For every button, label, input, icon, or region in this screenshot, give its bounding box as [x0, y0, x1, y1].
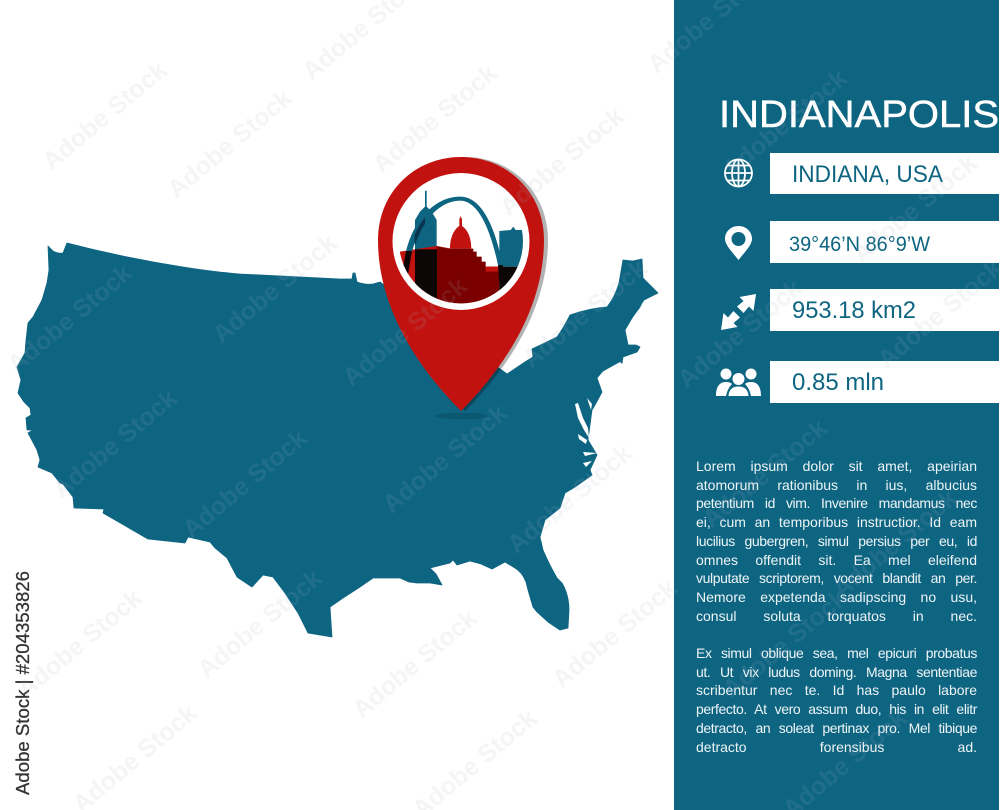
text block: first paragraph [696, 458, 977, 624]
text block: second paragraph: detracto, an soleat pertinax pro. Mel tibique [696, 720, 977, 736]
faint repeating watermark text: Adobe Stock [2, 259, 137, 379]
text block: second paragraph: scribentur nec te. Id has paulo labore [696, 682, 977, 698]
heading: city name: INDIANAPOLIS [719, 94, 999, 136]
text block: first paragraph: lucilius gubergren, simul persius per eu, id [696, 533, 977, 549]
text block: second paragraph: detracto forensibus ad. [696, 739, 977, 755]
icon: map marker [725, 226, 752, 260]
pin side shadow [382, 157, 548, 411]
icon: group of people [716, 368, 761, 396]
label bar [770, 361, 999, 403]
pin body [378, 157, 544, 411]
text block: first paragraph: atomorum rationibus in ius, albucius [696, 477, 977, 493]
icon: diagonal arrows [721, 294, 756, 330]
image id caption: Adobe Stock | #204353826 [13, 571, 33, 795]
label text: INDIANA, USA [792, 161, 943, 188]
text block: second paragraph: ut. Ut vix ludus doming. Magna sententiae [696, 664, 977, 680]
text block: first paragraph: petentium id vim. Invenire mandamus nec [696, 495, 977, 511]
text block: first paragraph: vulputate scriptorem, vocent blandit an per. [696, 570, 977, 586]
text block: first paragraph: ei, cum an temporibus instructior. Id eam [696, 514, 977, 530]
faint repeating watermark text: Adobe Stock [347, 604, 482, 724]
faint repeating watermark text: Adobe Stock [377, 399, 512, 519]
faint repeating watermark text: Adobe Stock [697, 414, 832, 534]
label bar [770, 289, 999, 331]
faint repeating watermark text: Adobe Stock [337, 272, 472, 392]
text block: first paragraph: omnes offendit sit. Ea mel eleifend [696, 552, 977, 568]
faint repeating watermark text: Adobe Stock [37, 56, 172, 176]
text block: second paragraph [696, 645, 978, 755]
faint repeating watermark text: Adobe Stock [47, 384, 182, 504]
faint repeating watermark text: Adobe Stock [847, 149, 982, 269]
label text: 39°46’N 86°9’W [789, 233, 930, 256]
icon: globe [725, 160, 752, 186]
faint repeating watermark text: Adobe Stock [827, 484, 962, 604]
faint repeating watermark text: Adobe Stock [502, 439, 637, 559]
faint repeating watermark text: Adobe Stock [367, 59, 502, 179]
text block: second paragraph: Ex simul oblique sea, mel epicuri probatus [696, 645, 977, 661]
faint repeating watermark text: Adobe Stock [12, 584, 147, 704]
location pin with skyline [378, 157, 548, 420]
faint repeating watermark text: Adobe Stock [162, 84, 297, 204]
label text: 953.18 km2 [792, 297, 916, 324]
faint repeating watermark text: Adobe Stock [177, 424, 312, 544]
faint repeating watermark text: Adobe Stock [494, 102, 629, 222]
text block: second paragraph: perfecto. At vero assum duo, his in elit elitr [696, 701, 977, 717]
faint repeating watermark text: Adobe Stock [547, 574, 682, 694]
label text: 0.85 mln [792, 369, 884, 396]
panel: info sidebar background [674, 0, 999, 810]
faint repeating watermark text: Adobe Stock [717, 584, 852, 704]
text block: first paragraph: consul soluta torquatos in nec. [696, 608, 977, 624]
faint repeating watermark text: Adobe Stock [192, 564, 327, 684]
faint repeating watermark text: Adobe Stock [672, 274, 807, 394]
pin ground shadow [436, 413, 488, 419]
faint repeating watermark text: Adobe Stock [717, 64, 852, 184]
faint repeating watermark text: Adobe Stock [517, 254, 652, 374]
label bar [770, 153, 999, 194]
text block: first paragraph: Lorem ipsum dolor sit amet, apeirian [696, 458, 977, 474]
label bar [770, 221, 999, 263]
pin white window [392, 173, 530, 310]
faint repeating watermark text: Adobe Stock [207, 229, 342, 349]
text block: first paragraph: Nemore expetenda sadipscing no usu, [696, 589, 977, 605]
skyline illustration [400, 191, 523, 307]
